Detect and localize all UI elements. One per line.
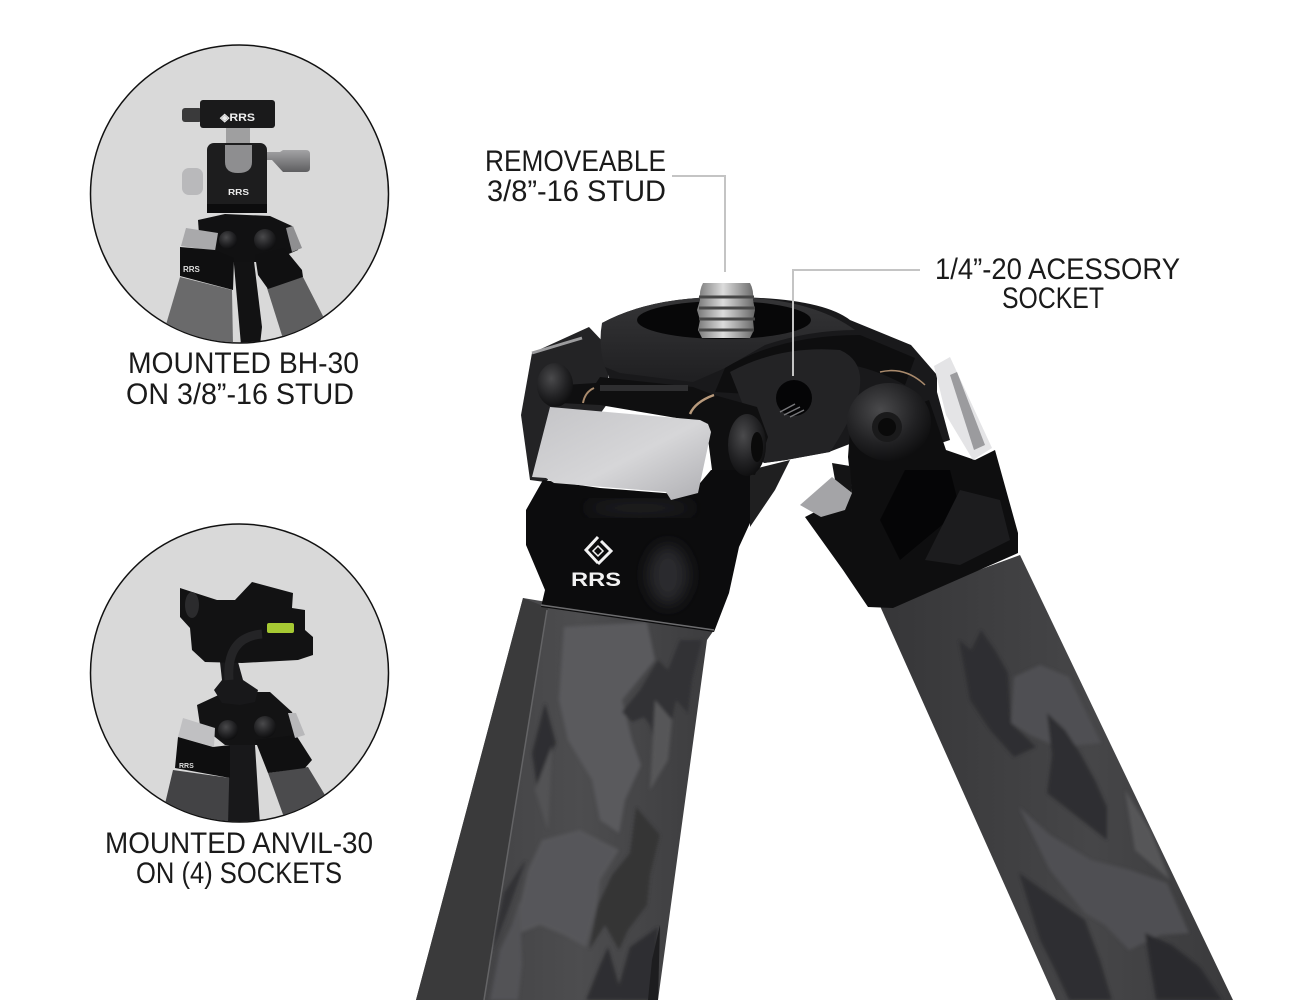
anvil arm (229, 634, 262, 680)
dial strip (207, 204, 267, 213)
left tube (166, 277, 233, 342)
tripod apex body (521, 297, 950, 482)
right silver plate (288, 713, 305, 738)
RRS logo on collar: RRS (571, 570, 621, 591)
knob right (267, 150, 310, 172)
strap (234, 262, 262, 342)
strap (228, 745, 260, 825)
right ball bolt (847, 383, 931, 461)
head notch (225, 145, 252, 173)
knob left (182, 168, 203, 195)
anvil side disk (185, 592, 199, 618)
clamp logo: ◈RRS (219, 112, 255, 124)
label: accessory socket: SOCKET (1002, 282, 1104, 315)
callout line: socket (793, 270, 920, 376)
inset: anvil on sockets (90, 524, 388, 825)
inset: ball head on stud (90, 45, 388, 345)
callout line: stud (672, 176, 725, 272)
right tube (268, 767, 324, 815)
bolt right (254, 229, 274, 248)
bolt left (219, 231, 236, 247)
bolt left (218, 720, 236, 738)
right silver plate (286, 226, 302, 252)
silver leg-lock plate (532, 407, 711, 500)
bolt right (254, 716, 274, 735)
right collar (805, 400, 1018, 608)
label: removeable stud: 3/8”-16 STUD (487, 175, 666, 208)
head logo: RRS (228, 188, 250, 197)
label: removeable stud: REMOVEABLE (485, 145, 666, 178)
left back bolt (537, 363, 573, 407)
ball head body (207, 143, 267, 213)
left collar logo: RRS (179, 763, 194, 770)
threaded stud (697, 283, 755, 338)
caption: Anvil-30: MOUNTED ANVIL-30 (105, 827, 373, 860)
label: accessory socket: 1/4”-20 ACESSORY (935, 253, 1180, 286)
left silver plate (181, 228, 218, 251)
clamp lever (182, 108, 202, 122)
apex base (197, 692, 300, 745)
accessory socket hole (776, 380, 812, 417)
left collar (180, 247, 234, 290)
label: accessory socket (935, 253, 1180, 315)
left tube (166, 770, 231, 822)
caption: BH-30: ON 3/8”-16 STUD (126, 378, 354, 411)
right collar (256, 254, 303, 289)
silver lever (800, 463, 852, 517)
left collar (526, 470, 750, 632)
neck (226, 128, 250, 145)
left hex bolt (728, 414, 766, 476)
caption: Anvil-30: ON (4) SOCKETS (136, 857, 342, 890)
caption: BH-30: MOUNTED BH-30 (128, 347, 359, 380)
right tube (267, 277, 324, 336)
anvil head (180, 582, 313, 663)
right carbon fibre leg (880, 555, 1233, 1000)
left collar (175, 737, 230, 778)
label: removeable stud (485, 145, 666, 208)
caption: Anvil-30 (105, 827, 373, 890)
left carbon fibre leg (416, 598, 714, 1000)
left collar logo: RRS (183, 265, 201, 274)
bubble level (267, 623, 294, 633)
RRS logo on collar (571, 537, 621, 591)
caption: BH-30 (126, 347, 359, 411)
strap behind apex (750, 460, 790, 527)
left silver plate (178, 718, 215, 747)
right silver plate (934, 357, 992, 460)
right collar (255, 735, 312, 773)
ball mount (214, 662, 258, 705)
clamp plate (200, 100, 275, 128)
apex base (198, 214, 298, 262)
